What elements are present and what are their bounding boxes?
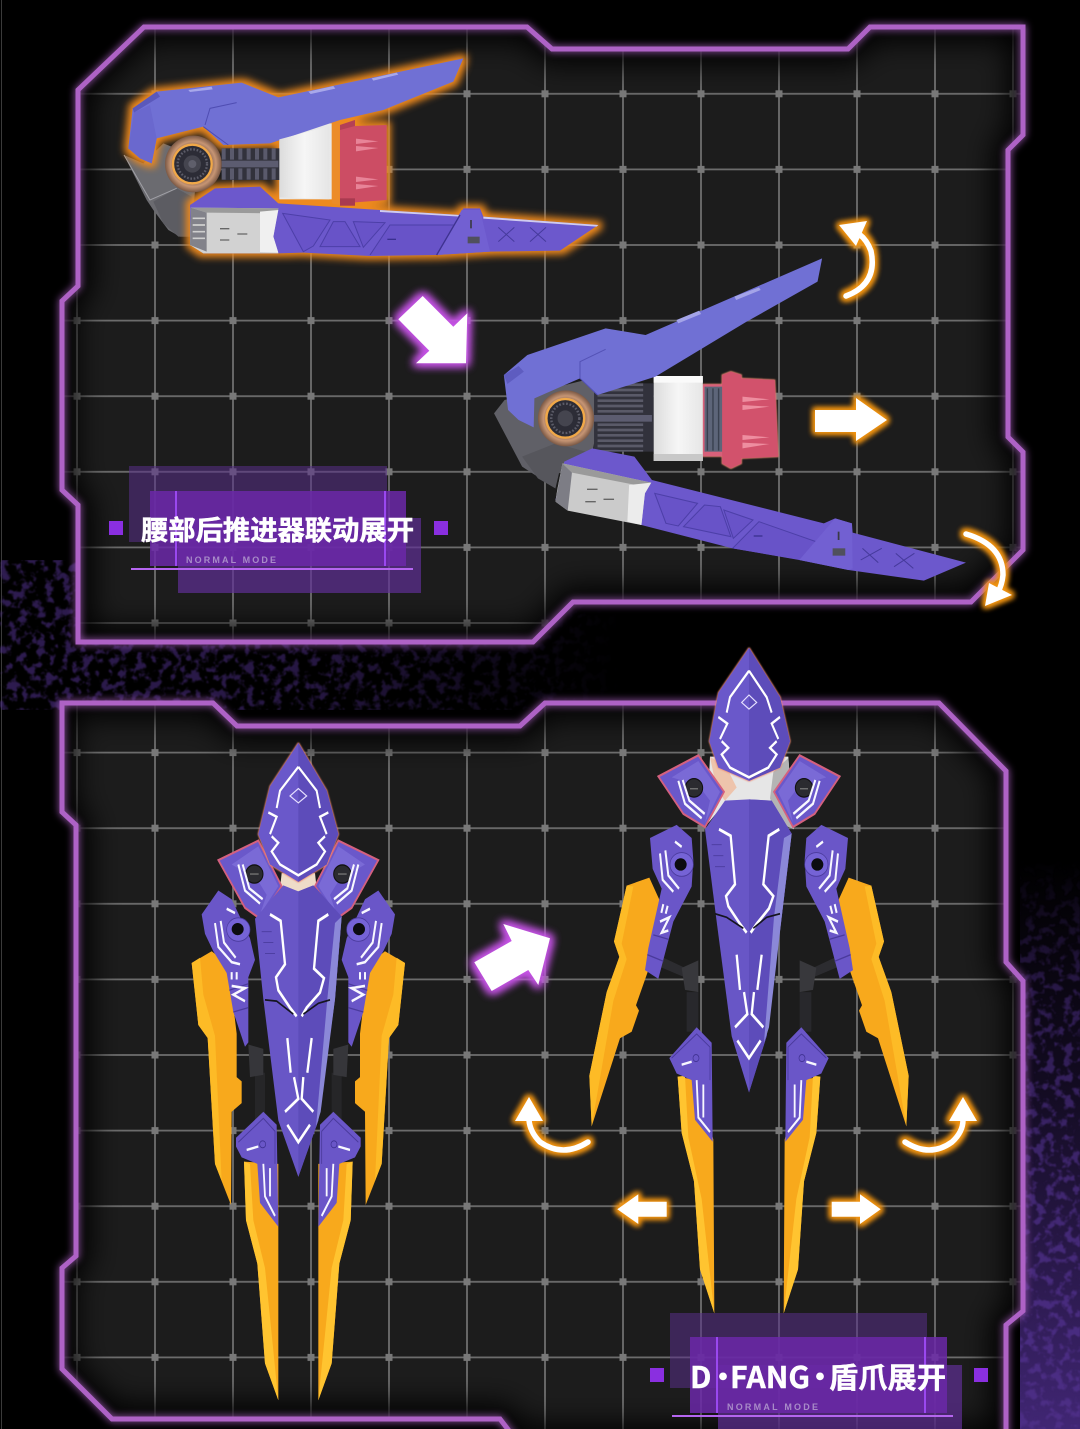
label: waist thruster: 腰部后推进器联动展开 xyxy=(141,509,414,548)
label: D-FANG: · xyxy=(708,1353,738,1397)
collar xyxy=(707,757,794,829)
label: D-FANG: NORMAL MODE xyxy=(727,1402,818,1412)
left edge hairline xyxy=(1,0,2,1429)
speckle: right side ink xyxy=(1020,860,1080,1429)
arrow: transition to open state xyxy=(398,296,467,363)
panel: top xyxy=(50,18,1040,650)
head gem 2 xyxy=(709,648,790,781)
label: D-FANG: · xyxy=(805,1353,835,1397)
shield body 2 xyxy=(705,799,792,1092)
speckle: middle band ink xyxy=(0,560,620,710)
shield body xyxy=(255,885,342,1177)
pink nozzle xyxy=(703,372,778,468)
panel: bottom xyxy=(50,700,1040,1429)
label: D-FANG xyxy=(650,1313,988,1429)
arrow: lower blade rotates down xyxy=(966,534,1012,606)
thruster: open state xyxy=(494,258,966,581)
thruster: closed state xyxy=(124,58,598,256)
label: D-FANG: D xyxy=(690,1353,711,1397)
arrow: outer blade rotates right xyxy=(905,1097,977,1150)
arrow: transition to open claw xyxy=(474,924,550,991)
shield claw: closed state xyxy=(192,743,405,1400)
arrow: nozzle extends right xyxy=(815,398,887,441)
arrow: upper blade rotates up xyxy=(839,221,872,296)
label: waist thruster xyxy=(109,466,448,593)
shield claw: open state xyxy=(589,648,909,1313)
arrow: slide right xyxy=(832,1194,881,1224)
arrow: slide left xyxy=(617,1194,667,1224)
label: waist thruster: NORMAL MODE xyxy=(186,555,276,565)
arrow: outer blade rotates left xyxy=(515,1097,588,1150)
shield head gem xyxy=(258,743,338,882)
label: D-FANG: 盾爪展开 xyxy=(829,1355,946,1397)
label: D-FANG: FANG xyxy=(730,1353,810,1397)
